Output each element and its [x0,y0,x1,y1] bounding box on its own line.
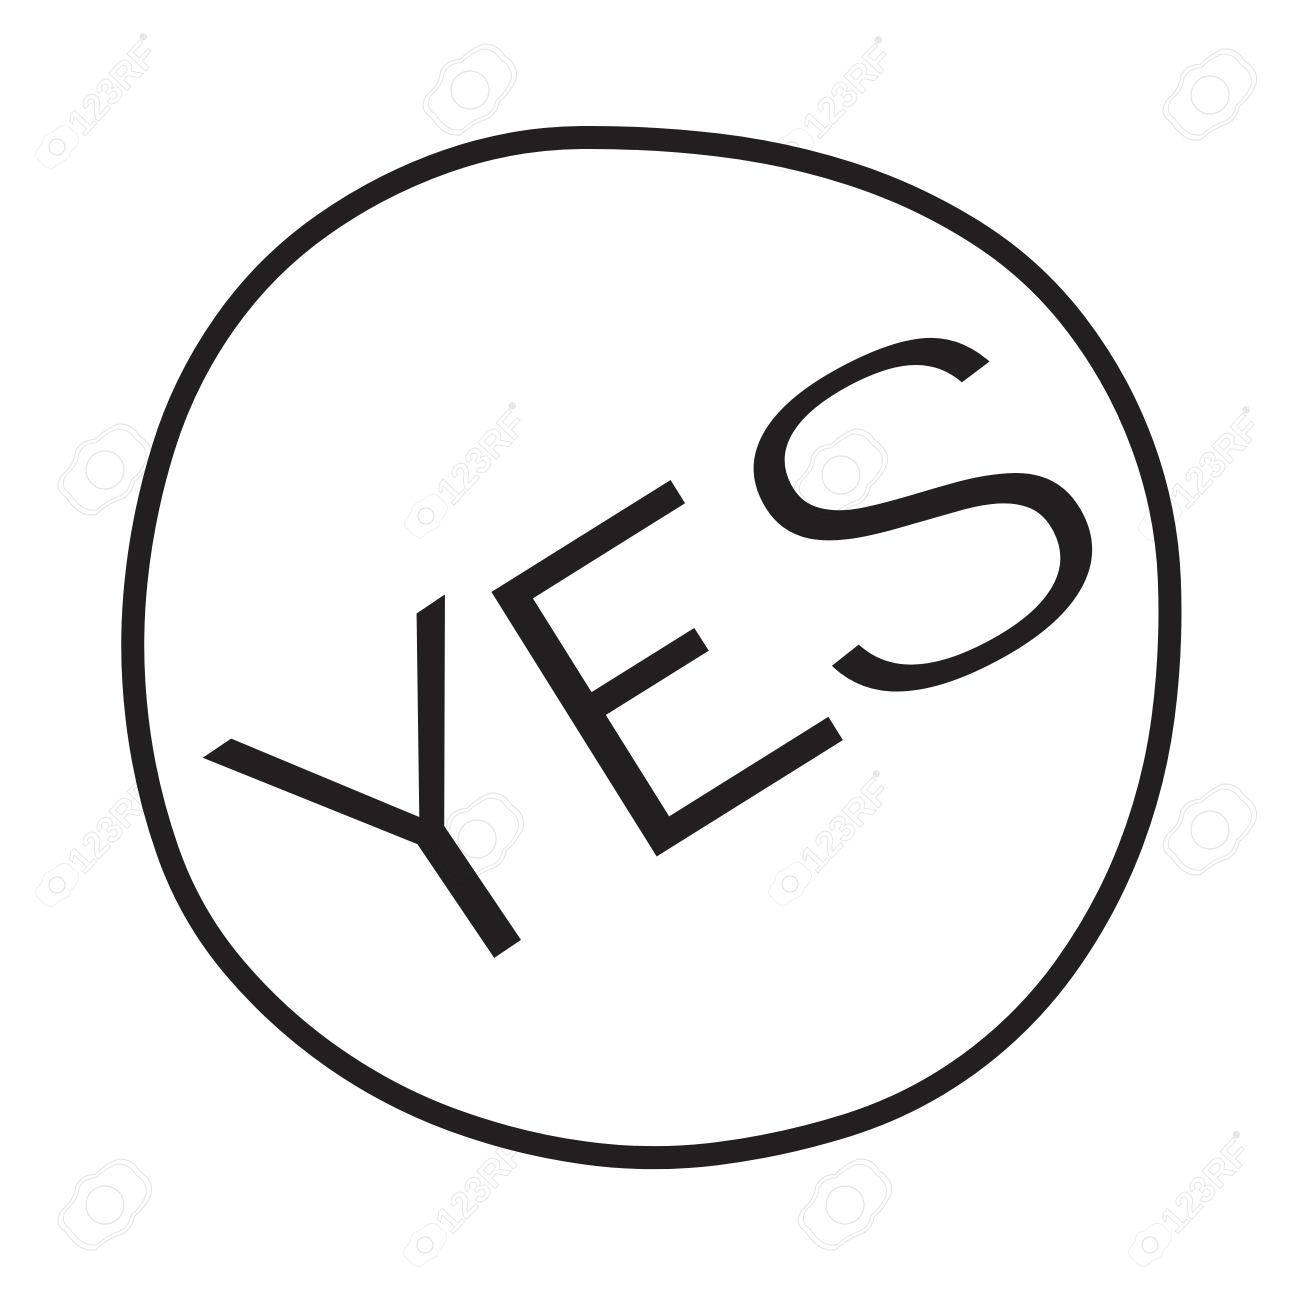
watermark: 123RF top third [762,32,905,181]
hand-drawn circle outline [133,137,1170,1158]
watermark: 123RF bottom right: ® [1230,1129,1242,1141]
watermark: egg second row left [46,410,164,528]
watermark: 123RF top left: ® [137,31,149,43]
letter E: E [404,375,916,964]
watermark: 123RF top left [27,29,170,178]
mask: shortens the E middle arm [686,572,790,665]
watermark: 123RF bottom right [1120,1127,1263,1276]
watermark: 123RF top left: 123RF [59,34,165,143]
letter Y: Y [117,484,714,1139]
watermark: 123RF third row left [27,767,170,916]
watermark: egg top right [1151,35,1269,153]
watermark: 123RF bottom second: ® [505,1129,517,1141]
watermark: 123RF bottom second: 123RF [427,1132,533,1241]
watermark: 123RF third row left: 123RF [59,772,165,881]
watermark: egg third row right [1151,770,1269,888]
watermark: 123RF bottom right: 123RF [1152,1132,1258,1241]
watermark: 123RF bottom second [395,1127,538,1276]
letter S: S [630,189,1204,841]
watermark: 123RF third row left: ® [137,769,149,781]
watermark: 123RF second row right: 123RF [1162,407,1268,516]
watermark: egg bottom third [786,1145,904,1263]
watermark: egg bottom left [46,1145,164,1263]
watermark: 123RF top third: ® [872,34,884,46]
watermark: 123RF second row: ® [506,400,518,412]
watermark: 123RF second row right: ® [1240,404,1252,416]
watermark: egg third row second [418,779,536,897]
watermark: 123RF second row: 123RF [428,403,534,512]
watermark: 123RF second row right [1130,402,1273,551]
watermark: egg top second [411,30,529,148]
watermark: 123RF third row third: ® [870,768,882,780]
watermark: 123RF second row [396,398,539,547]
watermark: egg second row third [782,415,900,533]
watermark: 123RF third row third [760,766,903,915]
word: YES [117,189,1204,1139]
watermark: 123RF top third: 123RF [794,37,900,146]
watermark: 123RF third row third: 123RF [792,771,898,880]
